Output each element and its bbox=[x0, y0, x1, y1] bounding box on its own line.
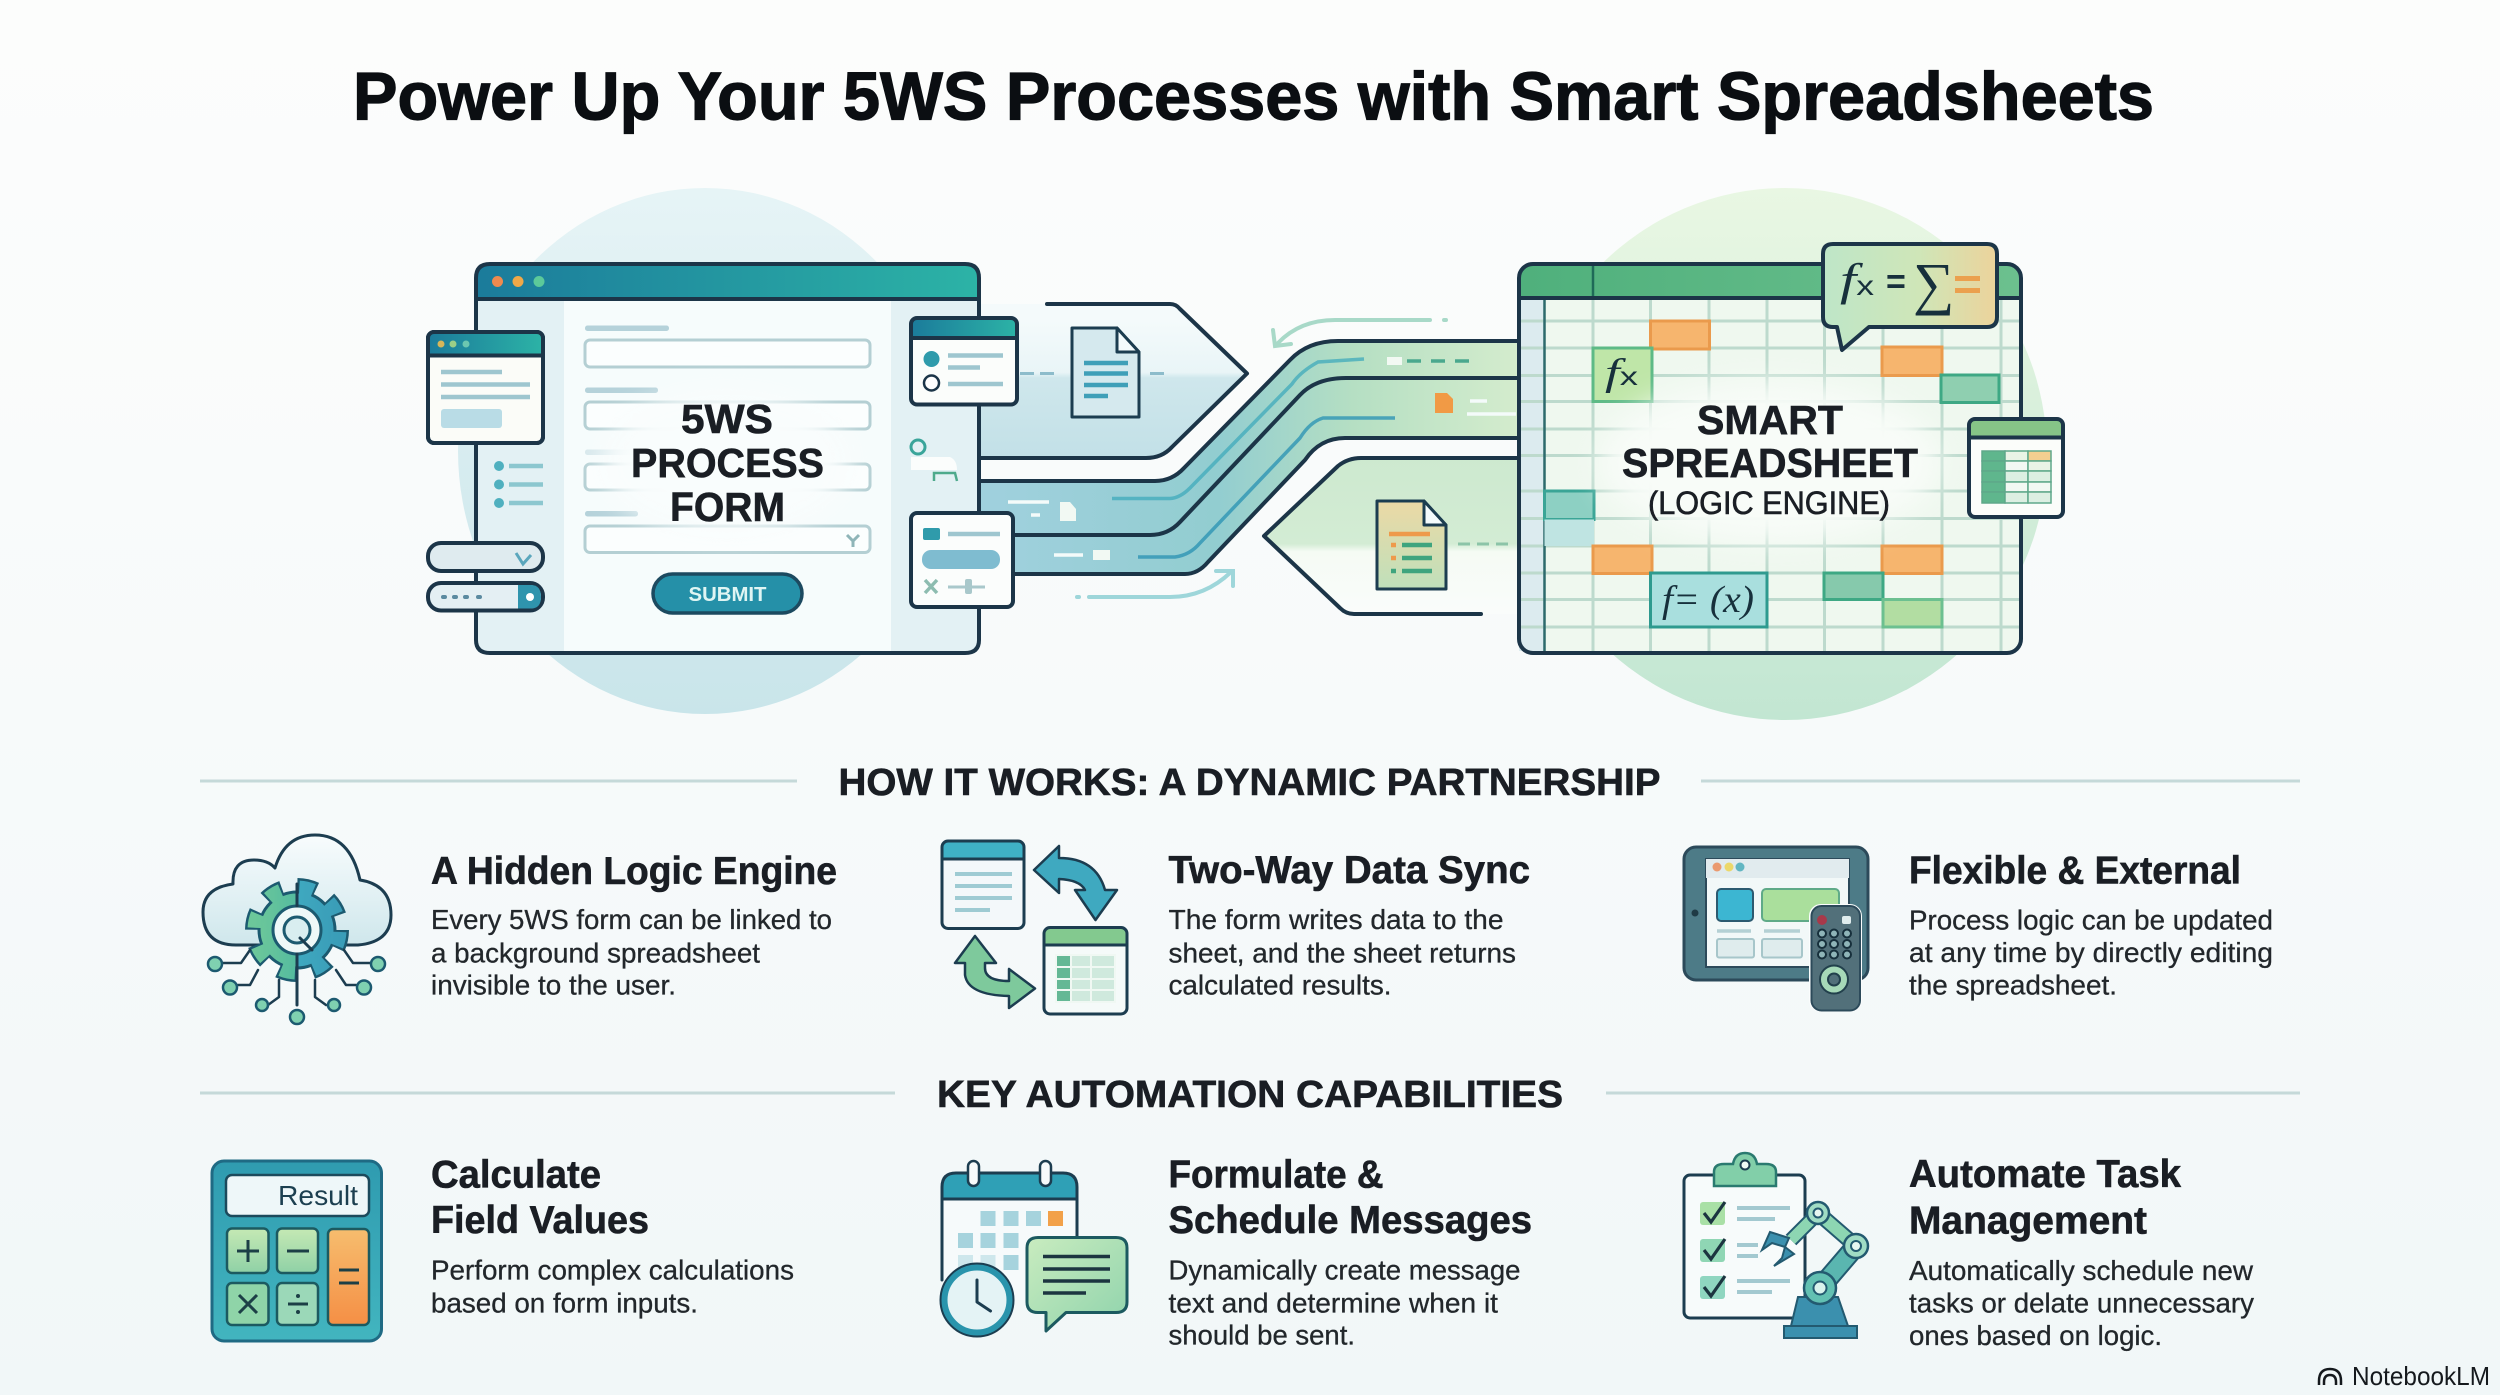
text: calculate field values: Calculate bbox=[431, 1154, 601, 1196]
text: automate task management: Automatically schedule new bbox=[1909, 1255, 2254, 1286]
text: two-way data sync bbox=[1168, 849, 1530, 1000]
text: flexible and external: Process logic can be updated bbox=[1909, 904, 2273, 936]
text: flexible and external bbox=[1909, 850, 2273, 1000]
background circle: form bbox=[458, 188, 952, 714]
sheet label: SMART bbox=[1697, 397, 1843, 443]
text: automate task management: Automate Task bbox=[1909, 1153, 2181, 1196]
form label bbox=[631, 396, 824, 530]
icon: tablet with remote bbox=[1684, 847, 1868, 1012]
cell formula: f=(x): f= (x) bbox=[1662, 579, 1754, 621]
field labels bbox=[585, 326, 669, 516]
submit button bbox=[653, 574, 802, 613]
form label: 5WS bbox=[681, 396, 773, 442]
card: mini spreadsheet bbox=[1969, 419, 2063, 517]
sheet header bbox=[1519, 264, 2021, 298]
text: calculate field values: Perform complex calculations bbox=[431, 1254, 794, 1286]
sheet label: SPREADSHEET bbox=[1622, 440, 1918, 486]
icon: calendar, clock and message bbox=[940, 1161, 1127, 1336]
text: a hidden logic engine bbox=[431, 850, 837, 1000]
icon: document on form arrow bbox=[1072, 328, 1139, 417]
panel: smart spreadsheet bbox=[1519, 264, 2021, 653]
text: flexible and external: Flexible & External bbox=[1909, 850, 2241, 892]
text glow bbox=[1600, 382, 1940, 542]
text: flexible and external: at any time by directly editing bbox=[1909, 937, 2273, 968]
arrow: thin return arrow top bbox=[1273, 320, 1446, 346]
arrow: thin forward arrow bottom bbox=[1077, 571, 1233, 597]
window buttons bbox=[492, 276, 544, 287]
text: flexible and external: the spreadsheet. bbox=[1909, 970, 2117, 1000]
heading: how it works: HOW IT WORKS: A DYNAMIC PARTNERSHIP bbox=[838, 762, 1660, 804]
arrow: sheet to form pentagon bbox=[1264, 458, 1518, 614]
background circle: spreadsheet bbox=[1523, 188, 2047, 720]
icon: calculator bbox=[212, 1161, 382, 1341]
icon: document on sheet arrow bbox=[1377, 501, 1446, 589]
callout: formula bubble: = bbox=[1886, 263, 1906, 301]
icon: calculator: Result bbox=[278, 1180, 358, 1211]
logo: NotebookLM: NotebookLM bbox=[2352, 1361, 2490, 1391]
arrow: data ribbons between form and sheet bbox=[979, 341, 1518, 574]
text: two-way data sync: The form writes data to the bbox=[1168, 904, 1504, 935]
text: formulate and schedule messages: Formulate & bbox=[1168, 1154, 1384, 1196]
pill: dropdown control bbox=[428, 543, 543, 571]
text glow bbox=[602, 390, 852, 534]
text: calculate field values bbox=[431, 1154, 794, 1318]
panel: 5WS process form window bbox=[476, 264, 979, 653]
callout: formula bubble: fx bbox=[1840, 254, 1874, 305]
icon: two-way sync bbox=[942, 841, 1127, 1014]
heading: key automation capabilities: KEY AUTOMATION CAPABILITIES bbox=[937, 1074, 1563, 1116]
card: left floating panel bbox=[428, 332, 543, 443]
text: formulate and schedule messages: Schedule Messages bbox=[1168, 1199, 1532, 1242]
text: formulate and schedule messages: text and determine when it bbox=[1168, 1288, 1498, 1318]
text: automate task management bbox=[1909, 1153, 2254, 1351]
callout: formula bubble: ∑ bbox=[1913, 251, 1954, 316]
text: a hidden logic engine: A Hidden Logic Engine bbox=[431, 850, 837, 893]
icon: hidden logic engine cloud and gear bbox=[203, 835, 391, 1024]
icon: clipboard with robot arm bbox=[1684, 1153, 1868, 1338]
text: a hidden logic engine: invisible to the user. bbox=[431, 970, 676, 1000]
text: two-way data sync: calculated results. bbox=[1168, 970, 1392, 1000]
arrow: form to sheet pentagon bbox=[979, 304, 1247, 458]
sidebar list bbox=[494, 461, 543, 508]
text: automate task management: tasks or delate unnecessary bbox=[1909, 1288, 2254, 1318]
sheet label bbox=[1622, 397, 1918, 521]
form fields bbox=[585, 340, 870, 552]
title: Power Up Your 5WS Processes with Smart Spreadsheets bbox=[353, 58, 2154, 134]
sheet label: (LOGIC ENGINE) bbox=[1648, 485, 1890, 521]
text: two-way data sync: sheet, and the sheet returns bbox=[1168, 938, 1516, 968]
text: formulate and schedule messages bbox=[1168, 1154, 1532, 1350]
text: two-way data sync: Two-Way Data Sync bbox=[1168, 849, 1530, 892]
submit button: SUBMIT bbox=[688, 584, 766, 606]
card: action options bbox=[911, 513, 1013, 607]
text: a hidden logic engine: Every 5WS form can be linked to bbox=[431, 904, 832, 935]
text: formulate and schedule messages: should be sent. bbox=[1168, 1320, 1355, 1350]
pill: toggle control bbox=[428, 583, 543, 610]
text: automate task management: Management bbox=[1909, 1200, 2147, 1242]
callout: formula bubble bbox=[1823, 244, 1997, 350]
icon: small connector glyph bbox=[911, 440, 957, 481]
text: automate task management: ones based on logic. bbox=[1909, 1320, 2162, 1351]
text: calculate field values: Field Values bbox=[431, 1199, 649, 1242]
text: calculate field values: based on form inputs. bbox=[431, 1288, 698, 1318]
form label: FORM bbox=[670, 484, 785, 530]
form label: PROCESS bbox=[631, 440, 824, 486]
highlighted cells bbox=[1544, 321, 1999, 627]
cell formula: fx: fx bbox=[1605, 352, 1638, 394]
text: formulate and schedule messages: Dynamically create message bbox=[1168, 1254, 1520, 1286]
grid lines bbox=[1519, 298, 2021, 651]
card: radio options bbox=[911, 318, 1017, 404]
text: a hidden logic engine: a background spreadsheet bbox=[431, 938, 760, 968]
